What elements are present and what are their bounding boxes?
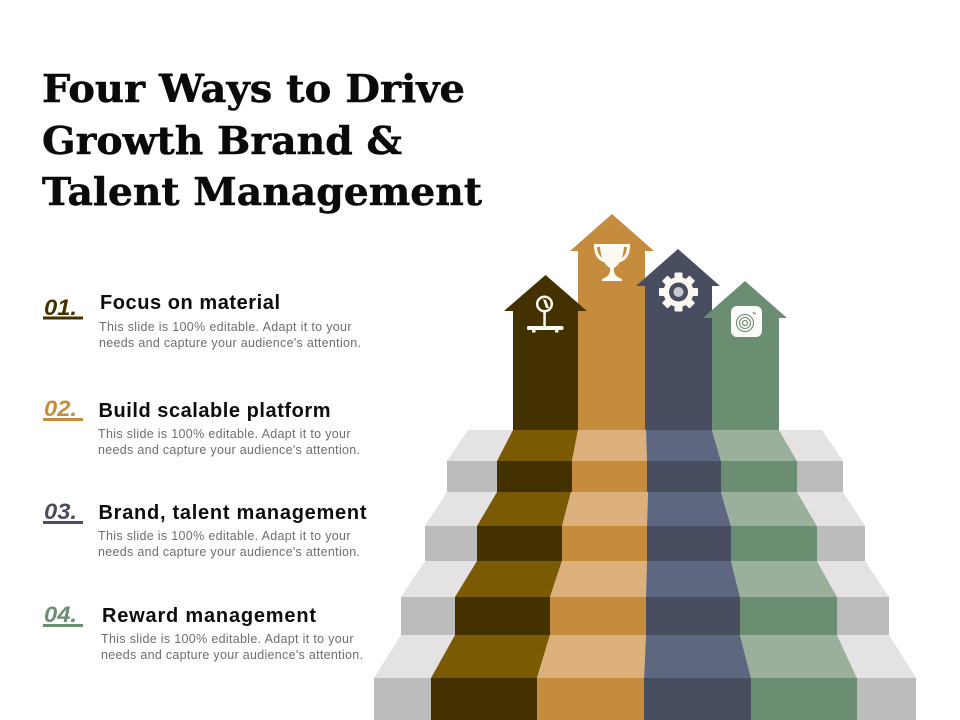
brown stair column [431,430,578,720]
description 01 [99,320,361,350]
arrow: green [703,281,787,430]
heading 02: Build scalable platform [98,400,330,422]
description 01: This slide is 100% editable. Adapt it to your [99,320,352,334]
arrow: orange [570,214,654,430]
description 03: This slide is 100% editable. Adapt it to your [98,529,350,543]
description 03 [98,529,360,559]
title: Talent Management [42,170,482,215]
item 01: focus on material [43,292,361,350]
item 04: reward management [43,602,363,662]
arrow: brown [504,275,587,430]
description 04: needs and capture your audience's attention. [101,648,363,662]
title [42,67,482,215]
icon: trophy [594,244,630,281]
orange stair column [537,430,648,720]
description 02: This slide is 100% editable. Adapt it to your [98,427,350,441]
heading 04: Reward management [102,605,316,627]
description 01: needs and capture your audience's attention. [99,336,361,350]
number 02: 02. [44,396,77,421]
navy stair column [644,430,751,720]
number 04: 04. [44,602,77,627]
heading 03: Brand, talent management [98,502,367,524]
number 01: 01. [44,295,77,320]
description 04: This slide is 100% editable. Adapt it to your [101,632,354,646]
item 02: build scalable platform [43,396,360,457]
right gray steps [779,430,916,720]
title: Four Ways to Drive [42,67,465,112]
description 02: needs and capture your audience's attention. [98,443,360,457]
description 03: needs and capture your audience's attention. [98,545,360,559]
green stair column [712,430,857,720]
arrow: navy [636,249,720,430]
description 02 [98,427,360,457]
icon: pressure gauge [527,297,564,332]
left gray steps [374,430,513,720]
number 03: 03. [44,499,77,524]
icon: gear [659,272,698,312]
staircase [374,430,916,720]
icon: target [731,306,762,337]
heading 01: Focus on material [100,292,280,314]
item 03: brand, talent management [43,499,367,559]
description 04 [101,632,363,662]
title: Growth Brand & [42,119,402,164]
